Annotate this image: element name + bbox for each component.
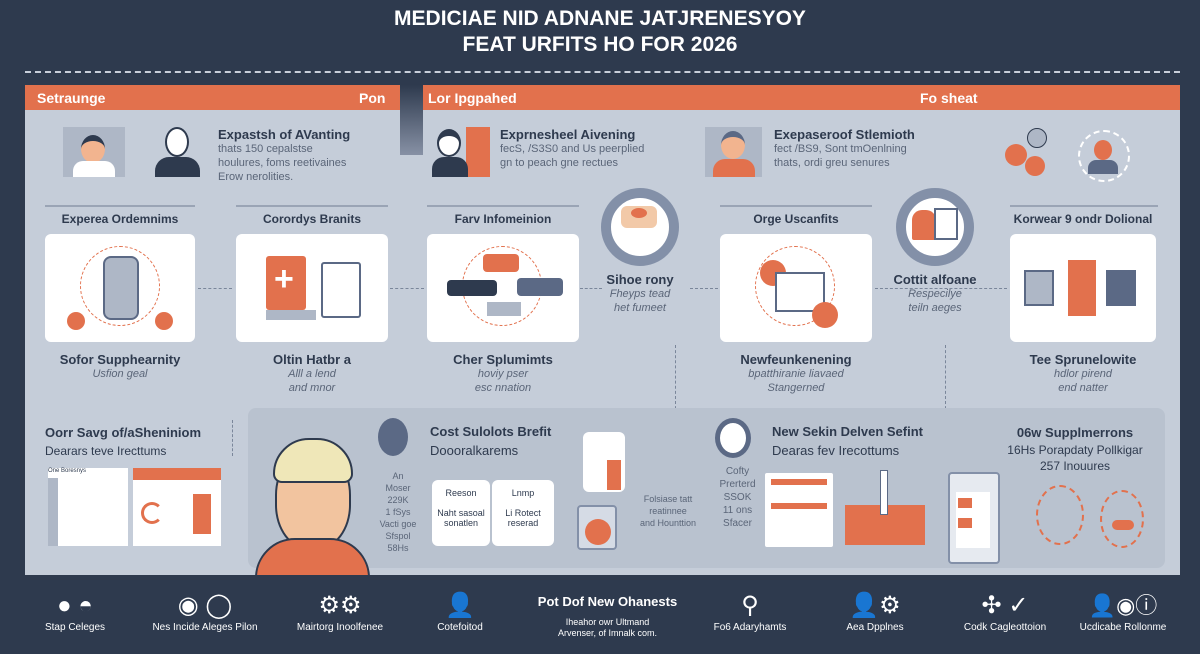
panel: card 2: Oltin Hatbr a: [273, 352, 351, 367]
left text block: [45, 425, 201, 458]
panel: card 5: [1010, 212, 1156, 394]
section: right: 16Hs Porapdaty Pollkigar: [1007, 443, 1143, 457]
center text: Iheahor owr Ultmand: [566, 617, 649, 627]
text block 1: Erow nerolities.: [218, 171, 293, 183]
icon item 2: ◉ ◯: [178, 592, 232, 619]
panel: circle 2: Respecilye: [908, 288, 962, 300]
text: SSOK: [724, 492, 751, 503]
icon item 2: Nes Incide Aleges Pilon: [152, 622, 258, 633]
icon: person 1: [63, 127, 125, 177]
panel: card 5: Tee Sprunelowite: [1030, 352, 1136, 367]
text block 2: fecS, /S3S0 and Us peerplied: [500, 143, 644, 155]
text: Cofty: [726, 466, 749, 477]
icon item 8: [1080, 593, 1166, 633]
arrows: [198, 288, 232, 289]
text: reatinnee: [649, 506, 687, 516]
icon: gears circle: [1100, 490, 1144, 548]
bottom icon strip: [45, 592, 1166, 638]
left mini charts: One Boresnys: [48, 468, 86, 474]
text: Vacti goe: [380, 519, 416, 529]
left text block: Dearars teve Irecttums: [45, 444, 166, 458]
text: Li Rotect: [505, 508, 541, 518]
icon item 2: [152, 592, 258, 633]
panel: card 1: Sofor Supphearnity: [60, 352, 180, 367]
icon item 1: Stap Celeges: [45, 622, 105, 633]
text: 1 fSys: [385, 507, 410, 517]
title: MEDICIAE NID ADNANE JATJRENESYOY: [394, 7, 806, 30]
text: sonatlen: [444, 518, 478, 528]
panel: card 4: [720, 212, 872, 394]
panel: circle 2: [893, 188, 977, 314]
text: Naht sasoal: [437, 508, 485, 518]
text: Prerterd: [719, 479, 756, 490]
icon: pills: [1005, 128, 1047, 176]
text block 3: Exepaseroof Stlemioth: [774, 127, 915, 142]
text: Sfacer: [723, 518, 752, 529]
panel: card 3: esc nnation: [475, 382, 531, 394]
text block 1: Expastsh of AVanting: [218, 127, 350, 142]
icon item 7: [964, 592, 1046, 633]
text block 3: [774, 127, 915, 169]
section: cost: [378, 418, 552, 458]
icon item 4: Cotefoitod: [437, 622, 483, 633]
panel: card 2: and mnor: [289, 382, 335, 394]
text block 2: gn to peach gne rectues: [500, 157, 618, 169]
panel: card 5: hdlor pirend: [1054, 368, 1112, 380]
header bar right: Fo sheat: [920, 90, 978, 106]
header bar right: Lor Ipgpahed: [428, 90, 517, 106]
left text block: Oorr Savg of/aSheniniom: [45, 425, 201, 440]
panel: card 3: Cher Splumimts: [453, 352, 553, 367]
section: right: [1007, 425, 1143, 473]
text: 58Hs: [387, 543, 408, 553]
icon item 3: Mairtorg Inoolfenee: [297, 622, 383, 633]
panel: card 4: bpatthiranie liavaed: [748, 368, 844, 380]
title: FEAT URFITS HO FOR 2026: [462, 33, 737, 56]
header bar right: [423, 85, 1180, 110]
icon: person 3: [432, 127, 490, 177]
panel: card 2: [236, 212, 388, 394]
text: New Sekin Delven Sefint: [772, 424, 923, 439]
illustration: big person: [255, 438, 370, 575]
panel: card 4: Newfeunkenening: [740, 352, 852, 367]
text: 229K: [387, 495, 409, 505]
icon: person 2: [155, 127, 200, 177]
panel: card 3: [427, 212, 579, 394]
section: right: 257 Inouures: [1040, 459, 1110, 473]
icon: person 4: [705, 127, 762, 177]
navy gap column: [400, 85, 423, 155]
panel: circle 1: het fumeet: [614, 302, 666, 314]
panel: card 2: +: [274, 260, 294, 298]
panel: card 1: Experea Ordemnims: [62, 212, 178, 226]
left mini charts: [48, 468, 128, 546]
text: Reeson: [445, 488, 477, 498]
center text: Arvenser, of Imnalk com.: [558, 628, 657, 638]
icon item 4: 👤: [445, 592, 475, 619]
panel: circle 2: Cottit alfoane: [893, 272, 977, 287]
icon item 7: ✣ ✓: [982, 592, 1028, 619]
panel: circle 1: [601, 188, 679, 314]
panel: card 4: Orge Uscanfits: [753, 212, 839, 226]
header bar left: [25, 85, 400, 110]
panel: card 1: Usfion geal: [92, 368, 148, 380]
text: Folsiase tatt: [644, 494, 692, 504]
text block 1: thats 150 cepalstse: [218, 143, 313, 155]
text: Doooralkarems: [430, 443, 518, 458]
main panel: [25, 85, 1180, 575]
icon: circle person: [1078, 130, 1130, 182]
bottom inner panel: [248, 408, 1165, 568]
text block 3: thats, ordi greu senures: [774, 157, 890, 169]
section: right: 06w Supplmerrons: [1017, 425, 1133, 440]
text: reserad: [508, 518, 538, 528]
text: Sfspol: [385, 531, 410, 541]
icon item 5: ⚲: [741, 592, 759, 619]
icon item 3: ⚙⚙: [318, 592, 362, 619]
center text: Pot Dof New Ohanests: [538, 594, 677, 609]
icon item 6: Aea Dpplnes: [846, 622, 904, 633]
icon item 1: [45, 592, 105, 633]
panel: card 3: Farv Infomeinion: [455, 212, 551, 226]
text block 1: [218, 127, 350, 183]
section: new: [715, 418, 923, 458]
icon item 6: 👤⚙: [849, 592, 901, 619]
doc icon: [583, 432, 625, 492]
icon item 6: [846, 592, 904, 633]
icon item 1: ● ◓: [57, 592, 93, 619]
text: An: [392, 471, 404, 481]
panel: circle 1: Sihoe rony: [606, 272, 674, 287]
text block 2: [500, 127, 644, 169]
icon item 8: Ucdicabe Rollonme: [1080, 622, 1166, 633]
text: 11 ons: [723, 505, 752, 516]
panel: card 3: hoviy pser: [478, 368, 528, 380]
text block 2: Exprnesheel Aivening: [500, 127, 635, 142]
panel: card 2: Alll a lend: [288, 368, 336, 380]
icon item 4: [437, 592, 483, 633]
icon item 7: Codk Cagleottoion: [964, 622, 1046, 633]
text: Dearas fev Irecottums: [772, 443, 899, 458]
divider lines: [45, 205, 195, 207]
text: and Hounttion: [640, 518, 696, 528]
center text: [538, 594, 677, 638]
icon item 3: [297, 592, 383, 633]
text block 3: fect /BS9, Sont tmOenlning: [774, 143, 907, 155]
title: [394, 7, 806, 56]
panel: card 2: Corordys Branits: [263, 212, 361, 226]
panel: circle 1: Fheyps tead: [610, 288, 670, 300]
panel: card 1: [45, 212, 195, 380]
text: Cost Sulolots Brefit: [430, 424, 551, 439]
header bar left: Setraunge: [37, 90, 105, 106]
panel: card 5: end natter: [1058, 382, 1108, 394]
header bar left: Pon: [359, 90, 385, 106]
icon item 5: Fo6 Adaryhamts: [714, 622, 786, 633]
panel: circle 2: teiln aeges: [908, 302, 962, 314]
text: Moser: [385, 483, 410, 493]
text block 1: houlures, foms reetivaines: [218, 157, 346, 169]
icon item 8: 👤◉ⓘ: [1089, 593, 1157, 618]
text: Lnmp: [512, 488, 534, 498]
icon item 5: [714, 592, 786, 633]
panel: card 5: Korwear 9 ondr Dolional: [1014, 212, 1152, 226]
panel: card 4: Stangerned: [768, 382, 824, 394]
icon: bulb: [1036, 485, 1084, 545]
